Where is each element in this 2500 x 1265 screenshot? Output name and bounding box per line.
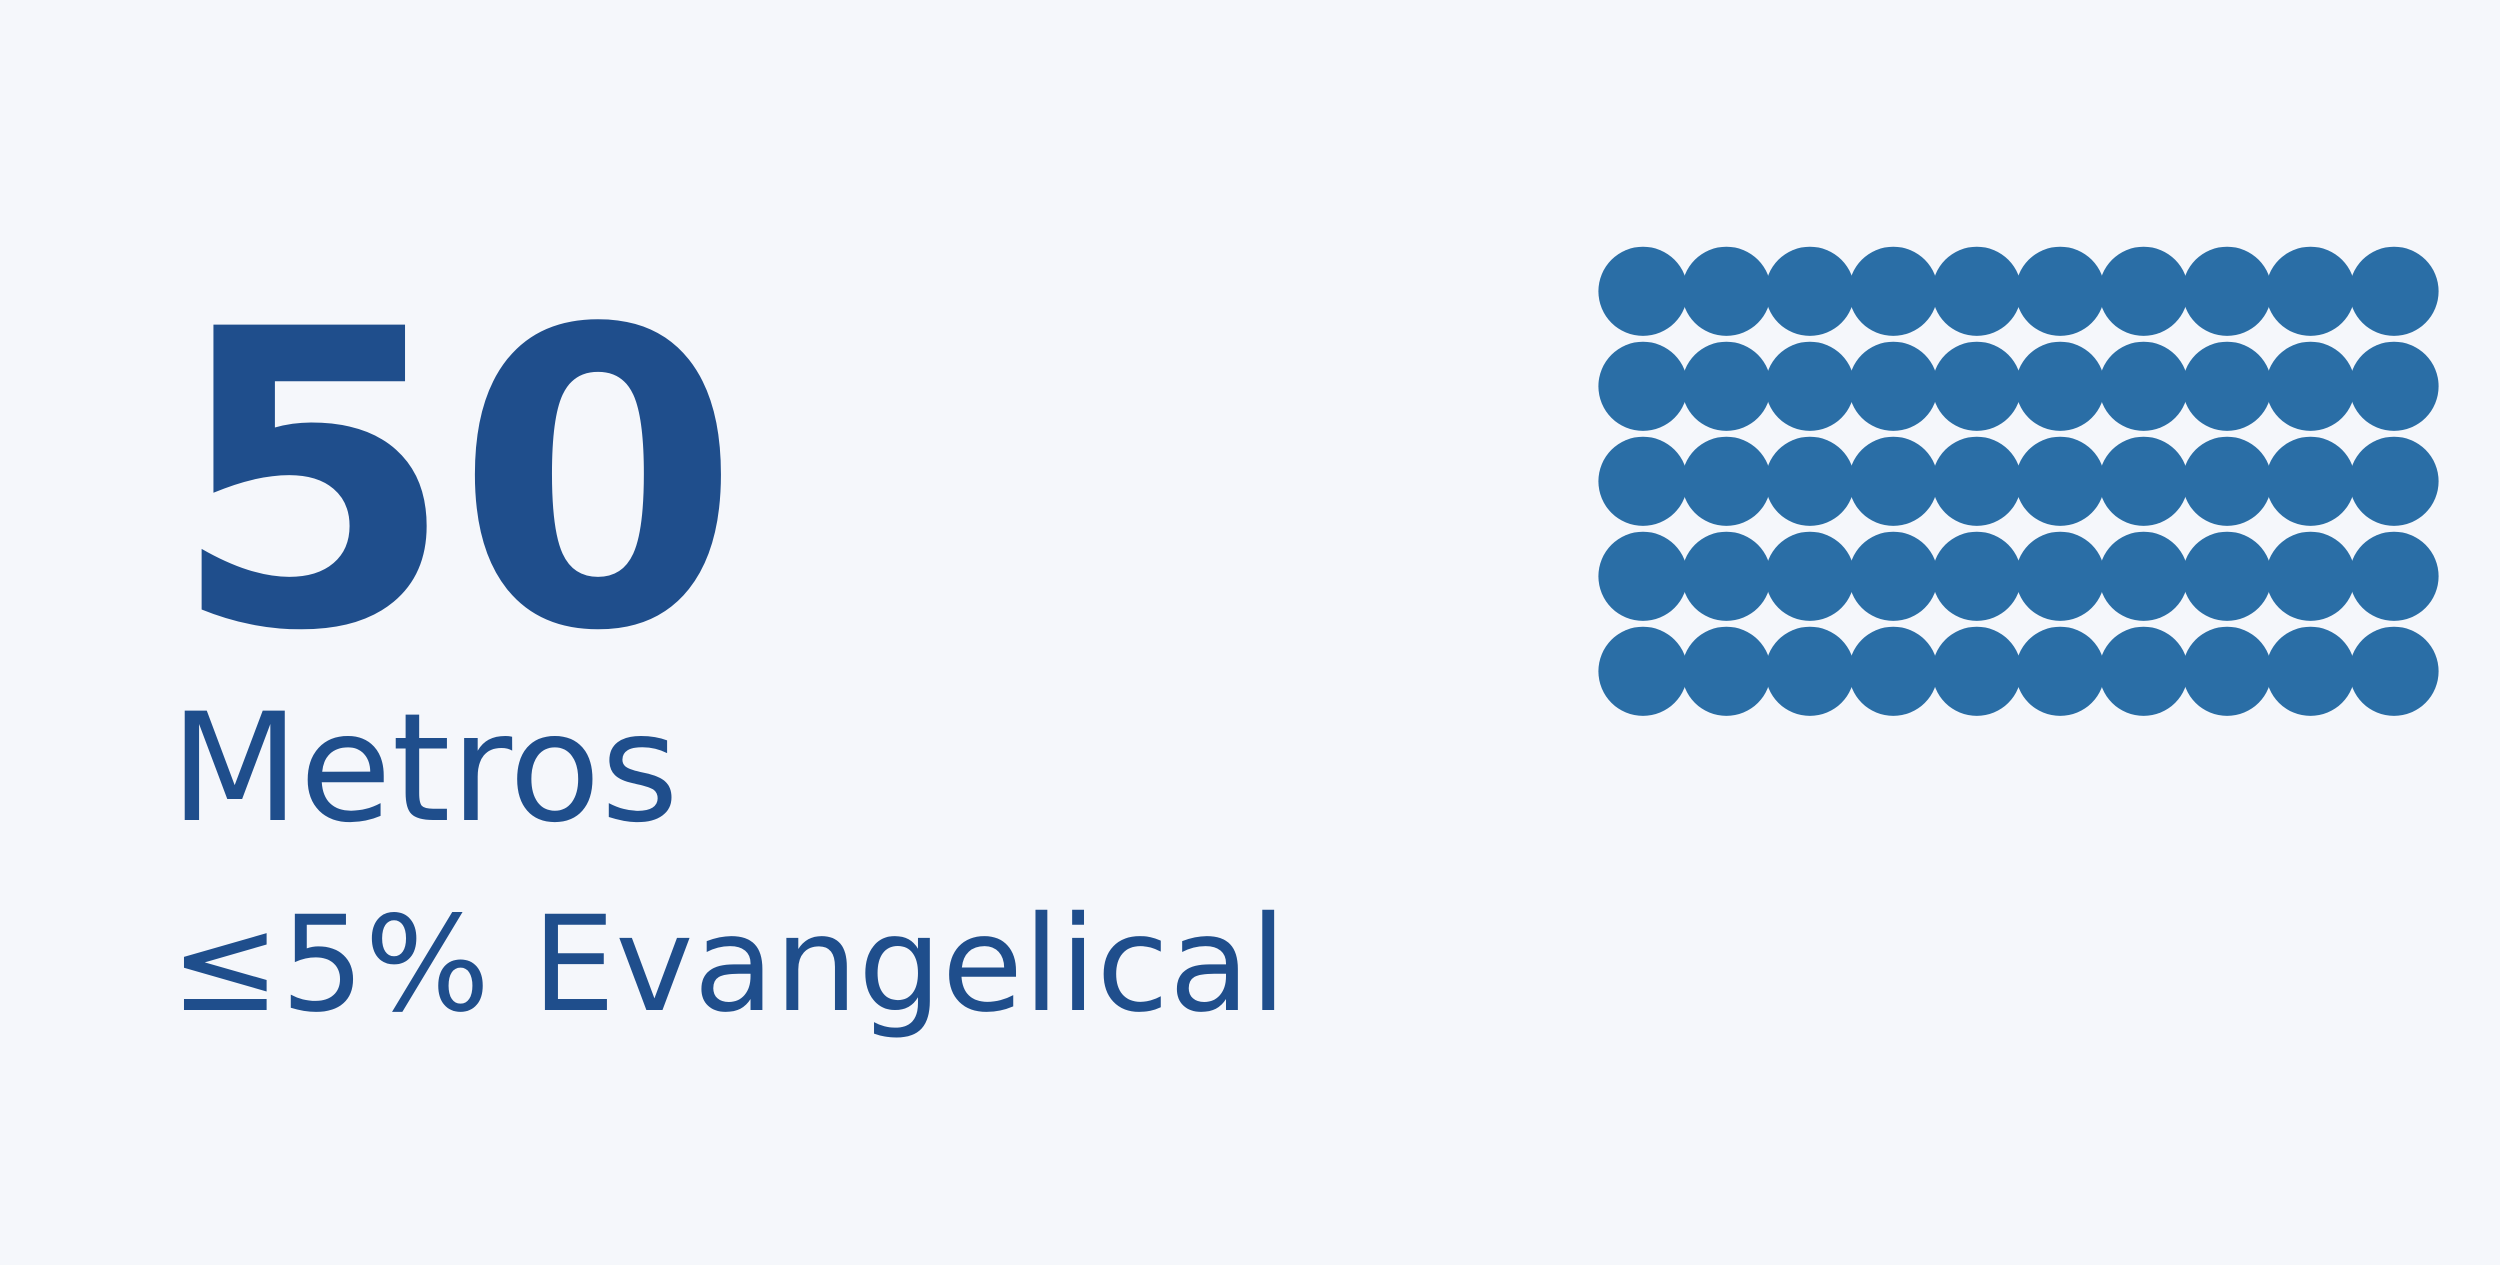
stat number: 50: 50	[170, 242, 741, 720]
label: ≤5% Evangelical: ≤5% Evangelical	[170, 888, 1287, 1042]
label: Metros: Metros	[170, 682, 679, 856]
dot grid: 50 metros	[1598, 247, 2439, 716]
